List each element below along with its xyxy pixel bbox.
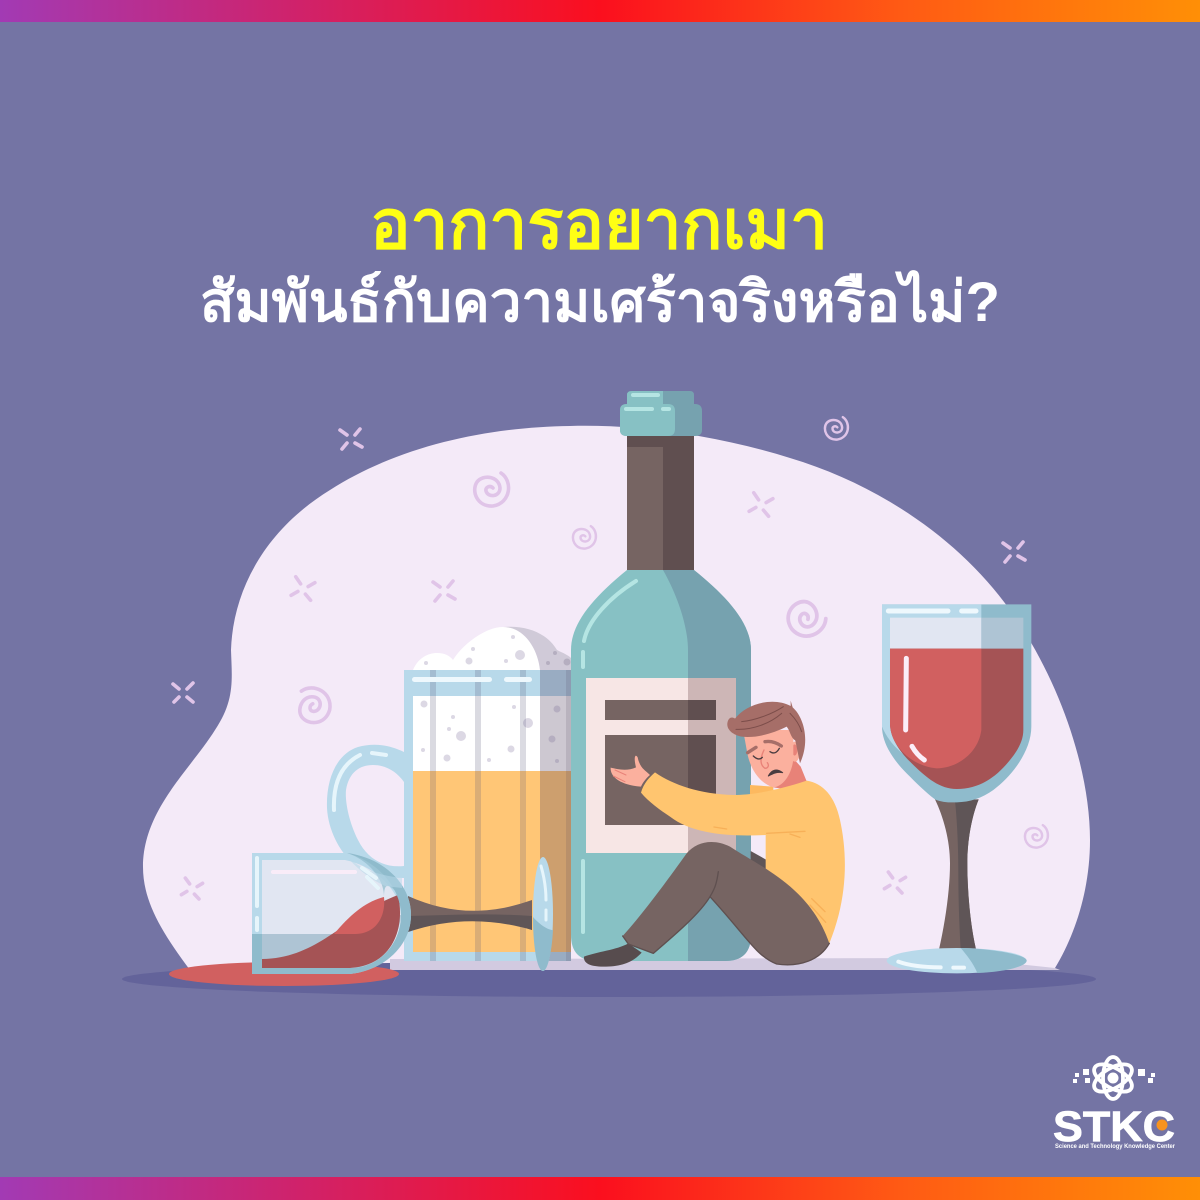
title	[200, 187, 1000, 333]
handle seen through glass	[345, 854, 402, 888]
STKC logo	[1053, 1057, 1176, 1151]
beer mug	[327, 627, 571, 961]
back shadow	[751, 851, 767, 872]
pixel squares	[1073, 1069, 1155, 1083]
logo wordmark: STKC	[1053, 1103, 1175, 1151]
standing wine glass	[882, 604, 1031, 973]
logo orange dot	[1156, 1120, 1168, 1130]
bottle neck	[627, 436, 694, 571]
glass foot	[887, 948, 1027, 973]
bowl outer	[882, 604, 1031, 802]
hair	[727, 701, 805, 763]
ear	[790, 742, 800, 762]
glass stem	[408, 896, 532, 932]
sad man hugging bottle	[584, 701, 845, 967]
mug shadow side	[540, 670, 571, 961]
shadow side bubbles	[546, 651, 570, 763]
foot highlights	[541, 866, 546, 920]
closed eyes	[753, 748, 779, 759]
wine spill	[169, 962, 399, 986]
background blob	[143, 426, 1090, 970]
sock	[584, 943, 642, 967]
empty glass	[890, 618, 981, 649]
glass highlights	[273, 870, 355, 874]
bottle highlights	[583, 581, 636, 932]
mug glass	[404, 670, 571, 961]
floor shadow	[122, 961, 1096, 997]
title: สัมพันธ์กับความเศร้าจริงหรือไม่?	[200, 269, 1000, 333]
nose	[761, 750, 768, 768]
bottom gradient bar	[0, 1177, 1200, 1200]
spilled wine inside glass	[262, 895, 400, 968]
wine	[890, 649, 1023, 789]
hand	[611, 756, 650, 787]
decorative sparkles	[173, 429, 1025, 901]
foam bubbles	[420, 635, 533, 762]
mouth	[768, 770, 783, 776]
mug rim highlights	[412, 677, 532, 682]
mug ribs	[430, 670, 526, 961]
bottle label	[586, 678, 688, 853]
stem	[935, 799, 979, 949]
fallen wine glass	[252, 853, 553, 974]
atom emblem	[1090, 1057, 1136, 1099]
far arm	[750, 785, 773, 797]
logo tagline: Science and Technology Knowledge Center	[1055, 1143, 1176, 1150]
decorative spirals	[292, 417, 1048, 848]
top gradient bar	[0, 0, 1200, 22]
glass foot	[533, 857, 553, 971]
face	[744, 730, 793, 787]
title: อาการอยากเมา	[370, 187, 828, 263]
bottle body	[571, 570, 751, 961]
floor band	[390, 958, 1060, 970]
wine bottle	[571, 391, 751, 961]
highlights	[906, 658, 924, 760]
foam	[413, 627, 540, 670]
eyebrows	[748, 741, 781, 753]
bottle cap	[620, 391, 702, 436]
neck	[773, 758, 807, 789]
handle highlights	[334, 753, 386, 810]
glass bowl	[252, 853, 411, 974]
sweater folds	[714, 827, 826, 922]
trousers	[623, 842, 829, 965]
bowl shaded edge	[252, 853, 411, 974]
sweater	[641, 772, 845, 943]
mug handle	[327, 745, 404, 878]
